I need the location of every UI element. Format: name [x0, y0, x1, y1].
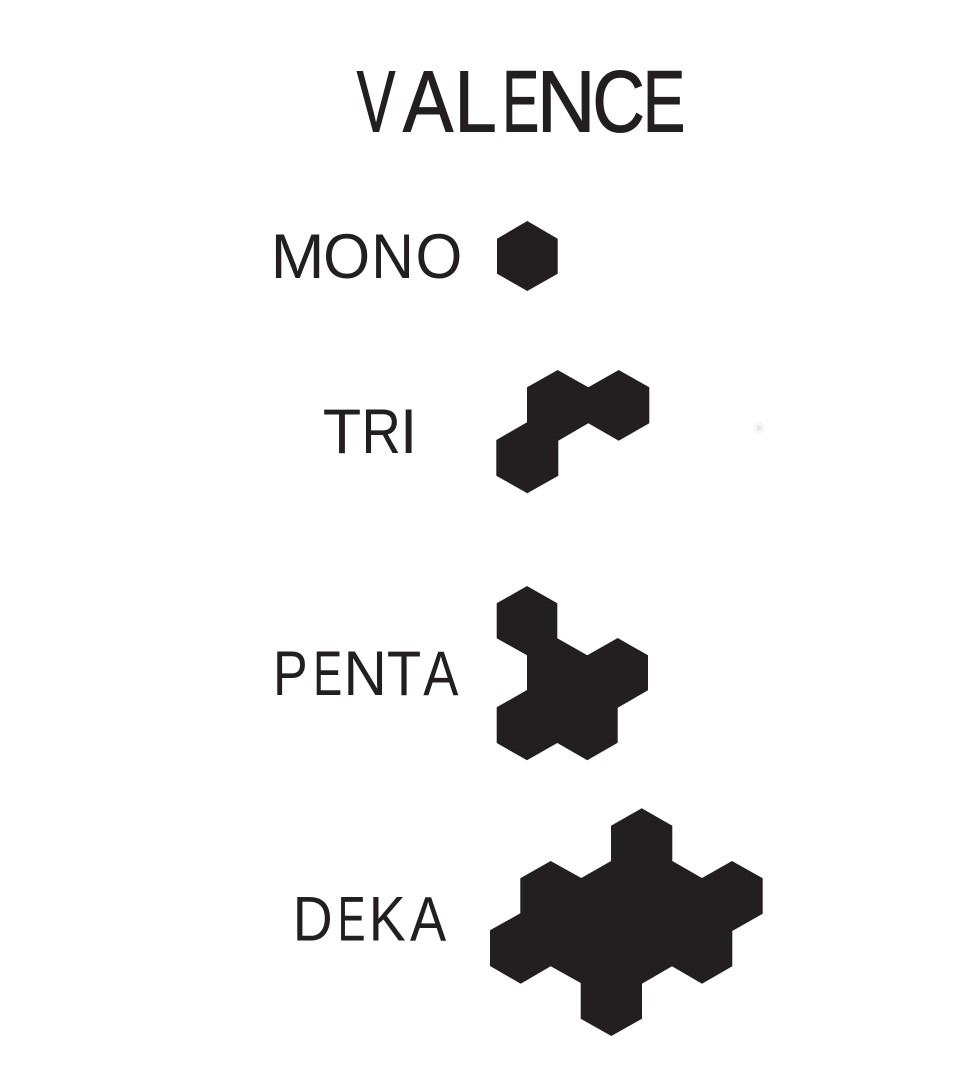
title: V: [357, 54, 395, 150]
title: N: [537, 54, 596, 150]
icon: penta five hexagons: [497, 586, 648, 760]
title: E: [643, 54, 685, 150]
label: penta: T: [387, 639, 421, 709]
icon: mono single hexagon: [497, 221, 558, 291]
icon: deka ten hexagons: [490, 808, 763, 1036]
title: E: [502, 54, 539, 150]
label: mono: O: [416, 222, 462, 292]
label: deka: K: [369, 885, 406, 955]
title: C: [592, 54, 645, 150]
label: tri: T: [323, 397, 361, 467]
label: tri: R: [362, 397, 401, 467]
label: penta: N: [343, 639, 387, 709]
label: deka: D: [293, 885, 333, 955]
label: mono: N: [371, 222, 414, 292]
label: tri: I: [400, 397, 417, 467]
label: deka: A: [410, 885, 446, 955]
title: A: [403, 54, 453, 150]
stray speck: [753, 422, 765, 434]
label: mono: O: [323, 222, 370, 292]
label: penta: A: [423, 639, 458, 709]
label: penta: E: [313, 639, 342, 709]
label: deka: E: [338, 885, 366, 955]
title: L: [454, 54, 497, 150]
label: penta: P: [273, 639, 308, 709]
icon: tri three hexagons: [496, 370, 649, 493]
label: mono: M: [271, 222, 325, 292]
